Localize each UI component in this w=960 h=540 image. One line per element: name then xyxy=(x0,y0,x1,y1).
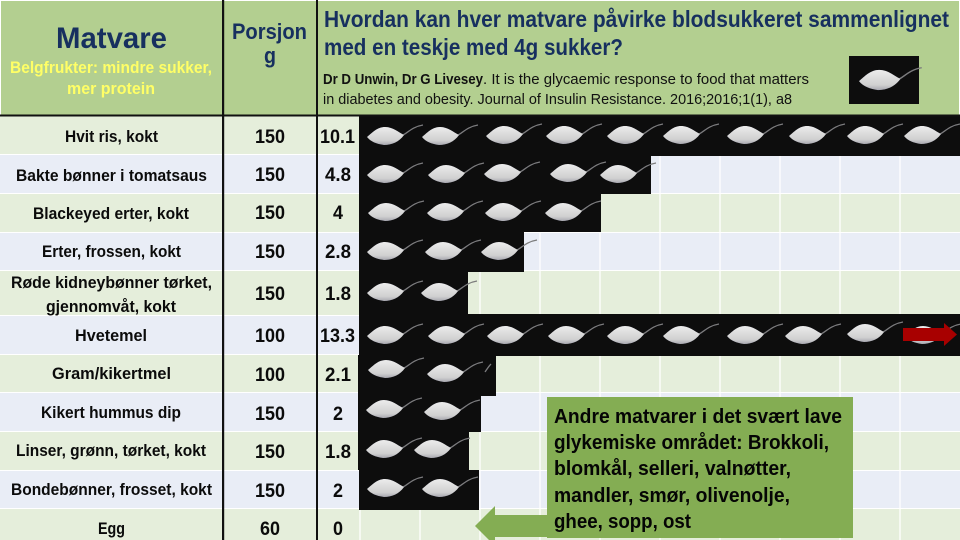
portion sizes xyxy=(255,126,285,540)
arrow: red, continues right xyxy=(903,323,957,346)
portion sizes: 60 xyxy=(260,518,280,540)
heading: Porsjon g xyxy=(232,19,307,68)
teaspoon counts: 4.8 xyxy=(325,164,351,186)
portion sizes: 150 xyxy=(255,164,285,186)
citation: . It is the glycaemic response to food that matters xyxy=(483,72,809,88)
spoons: Erter xyxy=(359,232,537,272)
portion sizes: 150 xyxy=(255,480,285,502)
portion sizes: 100 xyxy=(255,325,285,347)
portion sizes: 150 xyxy=(255,126,285,148)
subheading: Belgfrukter: mer protein xyxy=(67,79,155,98)
teaspoon counts: 1.8 xyxy=(325,283,351,305)
teaspoon counts: 1.8 xyxy=(325,441,351,463)
icon: teaspoon of sugar xyxy=(849,56,922,104)
teaspoon counts: 2.8 xyxy=(325,241,351,263)
citation: in diabetes and obesity. Journal of Insulin Resistance. 2016;2016;1(1), a8 xyxy=(323,92,792,108)
citation: Dr D Unwin, Dr G Livesey xyxy=(323,72,483,88)
callout: other low glycaemic foods: mandler, smør, olivenolje, xyxy=(554,484,790,507)
teaspoon counts: 0 xyxy=(333,518,343,540)
food labels: Kikert hummus dip xyxy=(41,404,181,422)
spoons: Hvit ris xyxy=(359,115,960,156)
main question title xyxy=(324,6,949,60)
callout: other low glycaemic foods: glykemiske området: Brokkoli, xyxy=(554,431,829,454)
portion sizes: 150 xyxy=(255,283,285,305)
spoons: Gram/kikertmel xyxy=(358,355,496,396)
heading: Porsjon g: Porsjon xyxy=(232,19,307,44)
callout: other low glycaemic foods: Andre matvarer i det svært lave xyxy=(554,405,842,428)
subheading: Belgfrukter: Belgfrukter: mindre sukker, xyxy=(10,58,212,77)
portion sizes: 150 xyxy=(255,202,285,224)
food labels: gjennomvåt, kokt xyxy=(46,298,176,316)
spoons: Kikert hummus xyxy=(358,396,481,432)
arrow: green, points left to egg row xyxy=(475,506,548,540)
heading: Matvare: Matvare xyxy=(56,22,167,55)
portion sizes: 100 xyxy=(255,364,285,386)
callout: other low glycaemic foods: blomkål, selleri, valnøtter, xyxy=(554,457,791,480)
portion sizes: 150 xyxy=(255,403,285,425)
teaspoon counts: 4 xyxy=(333,202,343,224)
food labels: Erter, frossen, kokt xyxy=(42,243,181,261)
food labels: Hvetemel xyxy=(75,327,147,345)
food labels: Gram/kikertmel xyxy=(52,365,171,383)
heading: Porsjon g: g xyxy=(264,43,276,68)
subheading: Belgfrukter xyxy=(10,58,212,98)
spoons: Hvetemel xyxy=(359,314,960,356)
spoons: Bondebønner xyxy=(359,470,479,510)
header band xyxy=(1,1,959,115)
food labels: Egg xyxy=(98,520,125,538)
teaspoon counts: 10.1 xyxy=(320,126,355,148)
portion sizes: 150 xyxy=(255,441,285,463)
food labels: Røde kidneybønner tørket, xyxy=(11,274,212,292)
main question title: med en teskje med 4g sukker? xyxy=(324,34,623,60)
teaspoon counts: 2 xyxy=(333,480,343,502)
spoons: Blackeyed erter xyxy=(359,193,601,232)
food labels: Blackeyed erter, kokt xyxy=(33,205,189,223)
citation xyxy=(323,72,809,108)
teaspoon counts xyxy=(320,126,355,540)
callout: other low glycaemic foods: ghee, sopp, ost xyxy=(554,510,691,533)
food labels: Hvit ris, kokt xyxy=(65,128,158,146)
portion sizes: 150 xyxy=(255,241,285,263)
food labels xyxy=(11,128,212,538)
teaspoon counts: 2 xyxy=(333,403,343,425)
teaspoon counts: 2.1 xyxy=(325,364,351,386)
spoons: Linser xyxy=(358,432,470,470)
callout: other low glycaemic foods xyxy=(547,397,853,538)
food labels: Bondebønner, frosset, kokt xyxy=(11,481,212,499)
spoons: Røde kidneybønner xyxy=(359,272,477,316)
food labels: Bakte bønner i tomatsaus xyxy=(16,167,207,185)
spoon rows xyxy=(358,115,960,510)
food labels: Linser, grønn, tørket, kokt xyxy=(16,442,206,460)
teaspoon counts: 13.3 xyxy=(320,325,355,347)
spoons: Bakte bønner xyxy=(359,155,656,194)
